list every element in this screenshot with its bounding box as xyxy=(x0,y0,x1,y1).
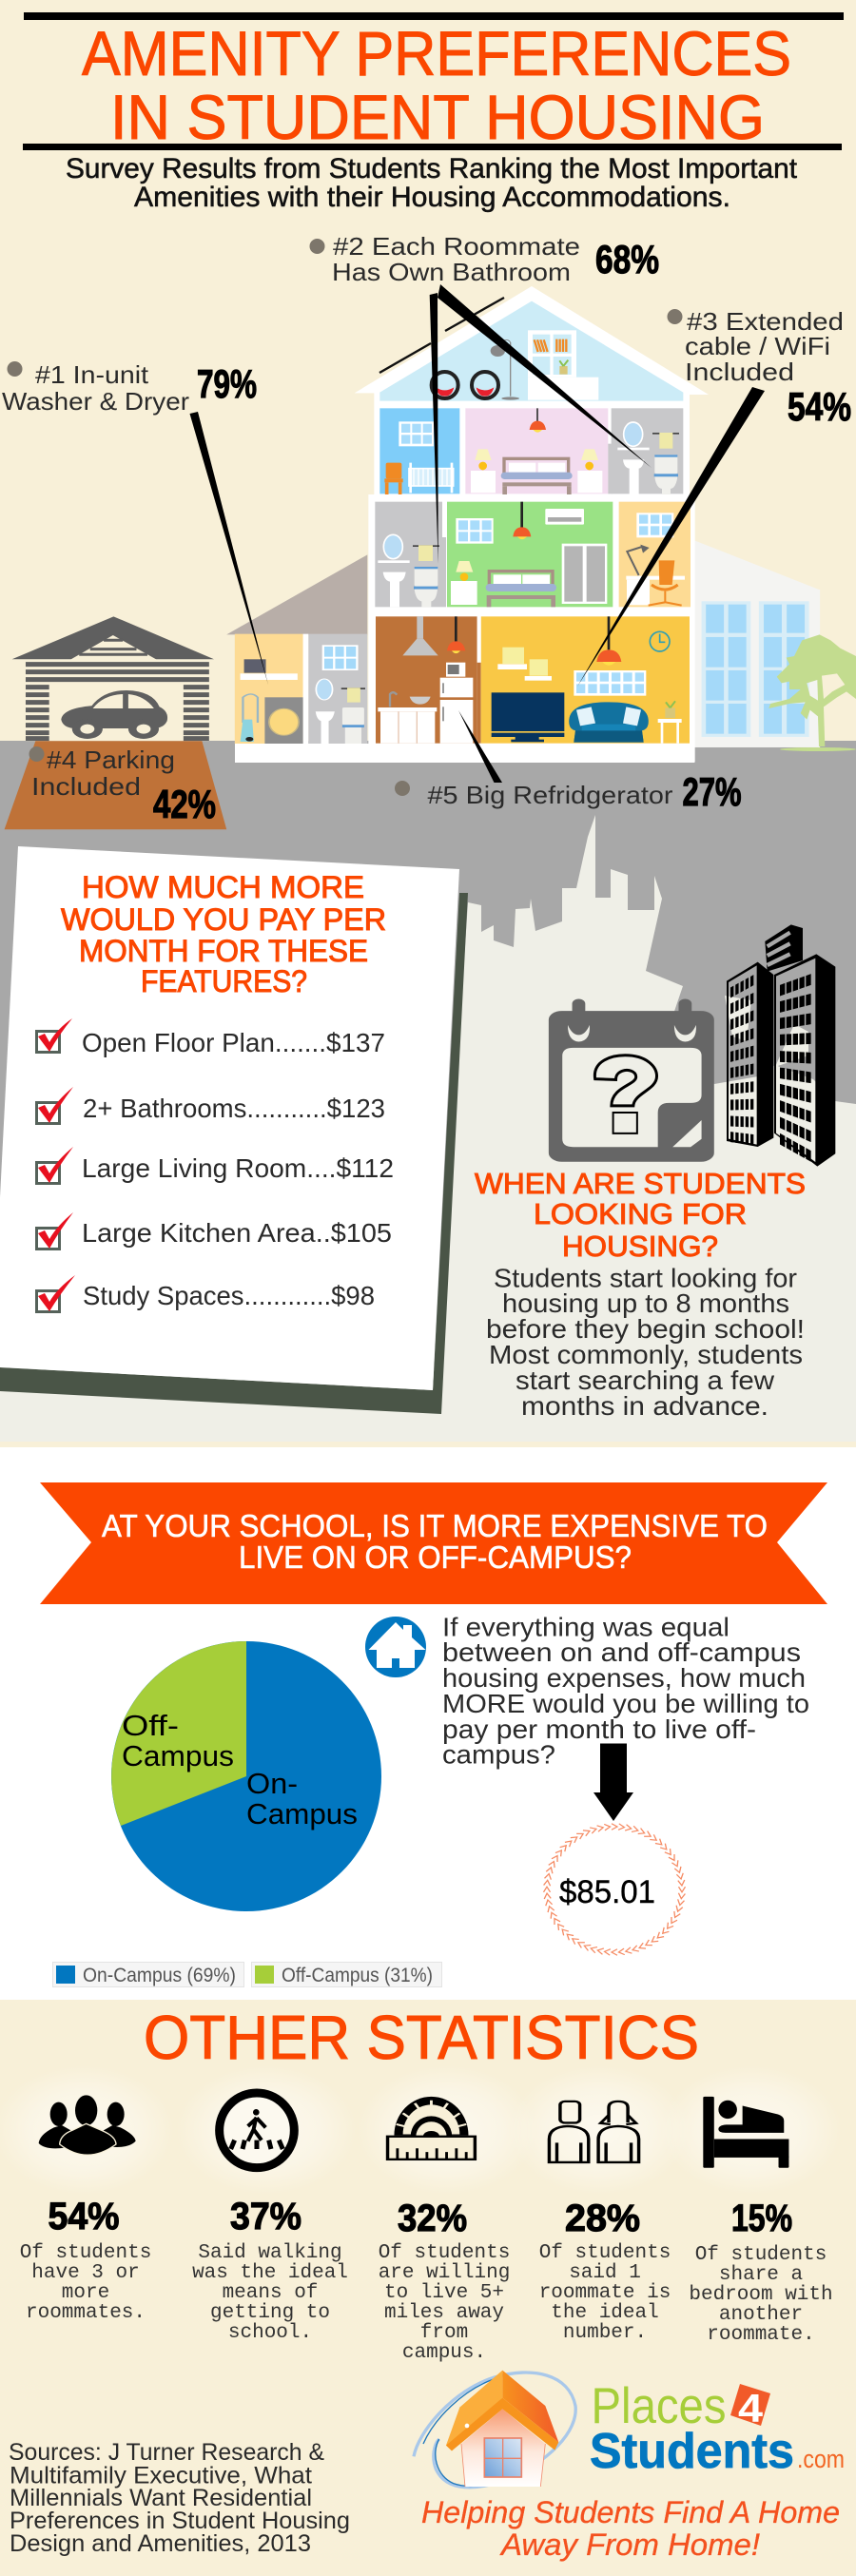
panel heading: FEATURES? xyxy=(141,964,307,998)
heading: when are students looking: HOUSING? xyxy=(562,1230,718,1263)
stat: 28 percent one roommate: 28% xyxy=(565,2198,640,2239)
text block: willingness to pay: between on and off-campus xyxy=(442,1637,801,1667)
callout: #3 cable and wifi xyxy=(577,307,851,687)
stat: 54 percent 3+ roommates: have 3 or xyxy=(31,2262,140,2284)
callout: #5 big refrigerator: 27% xyxy=(683,769,742,814)
logo: Places4Students xyxy=(414,2371,845,2562)
callout: #4 parking: Included xyxy=(31,772,141,801)
stat: 28 percent one roommate: Of students xyxy=(539,2242,671,2264)
callout: #4 parking: 42% xyxy=(153,782,216,826)
stat: 28 percent one roommate: roommate is xyxy=(539,2282,671,2304)
stat: 15 percent share bedroom: roommate. xyxy=(707,2324,815,2346)
stat: 32 percent live 5+ miles away: campus. xyxy=(402,2342,486,2364)
stat: 28 percent one roommate: number. xyxy=(563,2322,647,2344)
logo: Places4Students: Places xyxy=(592,2378,727,2434)
banner: on or off campus question: AT YOUR SCHOOL, IS IT MORE EXPENSIVE TO xyxy=(102,1508,768,1543)
heading: when are students looking: WHEN ARE STUDENTS xyxy=(475,1167,806,1200)
checklist item: kitchen: Large Kitchen Area..$105 xyxy=(82,1218,392,1248)
nursery xyxy=(384,421,454,494)
icon: apartment towers xyxy=(727,924,835,1167)
green bedroom xyxy=(451,502,607,607)
stat: 37 percent walking: school. xyxy=(228,2322,312,2344)
tagline xyxy=(421,2495,840,2562)
callout: #2 own bathroom xyxy=(310,232,659,564)
panel heading: HOW MUCH MORE xyxy=(82,870,364,904)
logo: Places4Students: Students xyxy=(590,2424,794,2479)
pie chart: Campus xyxy=(122,1739,234,1772)
subtitle: Amenities with their Housing Accommodations. xyxy=(134,182,730,213)
checklist item: study spaces xyxy=(36,1275,375,1312)
callout: #1 washer and dryer: 79% xyxy=(197,361,257,406)
stat: 32 percent live 5+ miles away: 32% xyxy=(398,2198,467,2239)
heading: other statistics: OTHER STATISTICS xyxy=(144,2003,699,2072)
stat: 28 percent one roommate: said 1 xyxy=(569,2262,641,2284)
main house cross-section xyxy=(355,286,709,763)
callout: #3 cable and wifi: cable / WiFi xyxy=(685,332,830,360)
callout: #2 own bathroom: #2 Each Roommate xyxy=(333,232,580,261)
panel heading: WOULD YOU PAY PER xyxy=(61,902,386,937)
stat: 32 percent live 5+ miles away: from xyxy=(420,2322,468,2344)
heading: when are students looking xyxy=(475,1167,806,1263)
text block: when students look: Students start looking for xyxy=(494,1263,797,1293)
checklist item: bathrooms: 2+ Bathrooms...........$123 xyxy=(83,1094,385,1123)
chart legend: Off-Campus (31%) xyxy=(282,1965,433,1986)
left annex house xyxy=(226,554,367,744)
middle bathroom xyxy=(378,534,439,607)
icon: logo house xyxy=(414,2371,575,2488)
pie chart: Campus xyxy=(246,1797,358,1830)
attic furniture xyxy=(432,330,598,400)
right annex house xyxy=(694,540,820,747)
pink bedroom xyxy=(471,408,602,494)
logo: Places4Students: .com xyxy=(797,2445,845,2473)
garage xyxy=(5,616,226,829)
checklist item: open floor plan: Open Floor Plan.......$137 xyxy=(82,1028,385,1057)
kitchen xyxy=(378,616,473,744)
panel heading: MONTH FOR THESE xyxy=(79,934,368,968)
text block: willingness to pay: pay per month to live off- xyxy=(442,1714,756,1744)
callout: #2 own bathroom: 68% xyxy=(595,237,659,281)
stat: 37 percent walking: Said walking xyxy=(198,2242,342,2264)
callout: $85.01 in chevron ring xyxy=(537,1818,691,1961)
text block: willingness to pay xyxy=(442,1613,809,1769)
text block: when students look xyxy=(486,1263,805,1421)
callout: #1 washer and dryer xyxy=(2,360,268,685)
panel heading xyxy=(61,870,386,998)
stat: 54 percent 3+ roommates xyxy=(0,2065,174,2324)
stat: 15 percent share bedroom: bedroom with xyxy=(689,2284,833,2306)
checklist item: living room: Large Living Room....$112 xyxy=(82,1153,394,1183)
text block: willingness to pay: If everything was equal xyxy=(442,1613,730,1642)
chart legend xyxy=(53,1963,441,1987)
stat: 54 percent 3+ roommates: 54% xyxy=(48,2196,120,2237)
upper bathroom xyxy=(617,422,679,494)
text block: sources: Preferences in Student Housing xyxy=(10,2508,350,2534)
icon: number 4 tile xyxy=(730,2384,770,2431)
icon: three people xyxy=(39,2095,136,2155)
icon: protractor and ruler xyxy=(388,2097,475,2160)
checklist item: study spaces: Study Spaces............$98 xyxy=(83,1281,375,1310)
header: title and subtitle xyxy=(23,12,844,213)
chart legend: On-Campus (69%) xyxy=(83,1965,236,1986)
heading: when are students looking: LOOKING FOR xyxy=(534,1197,747,1230)
icon: car xyxy=(61,690,167,739)
text block: when students look: before they begin school! xyxy=(486,1314,805,1344)
icon: house in blue circle xyxy=(365,1617,426,1677)
text block: when students look: housing up to 8 months xyxy=(502,1288,789,1318)
text block: when students look: Most commonly, students xyxy=(489,1340,803,1369)
pie chart: On- xyxy=(246,1767,298,1800)
stat: 28 percent one roommate xyxy=(509,2065,690,2344)
stat: 54 percent 3+ roommates: Of students xyxy=(20,2242,151,2264)
text block: willingness to pay: MORE would you be willing to xyxy=(442,1689,809,1718)
icon: person in bed xyxy=(703,2097,788,2168)
callout: #4 parking xyxy=(29,746,216,826)
text block: willingness to pay: housing expenses, how much xyxy=(442,1663,806,1693)
tree xyxy=(768,634,856,751)
callout: #3 cable and wifi: #3 Extended xyxy=(687,307,844,336)
text block: willingness to pay: campus? xyxy=(442,1740,555,1769)
checklist item: kitchen xyxy=(36,1212,392,1249)
callout: #1 washer and dryer: Washer & Dryer xyxy=(2,387,189,416)
stat: 28 percent one roommate: the ideal xyxy=(551,2302,659,2324)
callout: #5 big refrigerator: #5 Big Refridgerator xyxy=(428,781,673,809)
callout: #3 cable and wifi: Included xyxy=(685,358,794,386)
stat: 32 percent live 5+ miles away: are willing xyxy=(379,2262,510,2284)
callout: #1 washer and dryer: #1 In-unit xyxy=(35,360,149,389)
stat: 15 percent share bedroom: another xyxy=(719,2304,803,2326)
checklist item: open floor plan xyxy=(36,1018,385,1057)
stat: 37 percent walking: getting to xyxy=(210,2302,330,2324)
tagline: Helping Students Find A Home xyxy=(421,2495,840,2529)
checklist item: living room xyxy=(36,1147,394,1183)
stat: 15 percent share bedroom: share a xyxy=(719,2264,803,2286)
callout: #5 big refrigerator xyxy=(395,710,742,814)
subtitle: Survey Results from Students Ranking the Most Important xyxy=(66,153,798,184)
study xyxy=(626,513,685,606)
stat: 15 percent share bedroom: 15% xyxy=(731,2198,792,2239)
tagline: Away From Home! xyxy=(499,2528,760,2562)
stat: 54 percent 3+ roommates: roommates. xyxy=(26,2302,146,2324)
stat: 54 percent 3+ roommates: more xyxy=(62,2282,109,2304)
stat: 32 percent live 5+ miles away: Of students xyxy=(379,2242,510,2264)
text block: sources: Millennials Want Residential xyxy=(10,2485,312,2511)
subtitle xyxy=(66,153,798,213)
callout: #2 own bathroom: Has Own Bathroom xyxy=(332,258,571,286)
icon: pedestrian crossing sign xyxy=(220,2093,294,2168)
text block: when students look: start searching a few xyxy=(516,1365,775,1395)
title xyxy=(82,18,791,152)
arrow: down to amount xyxy=(593,1744,633,1821)
text block: when students look: months in advance. xyxy=(521,1391,768,1421)
text block: sources: Sources: J Turner Research & xyxy=(9,2439,324,2466)
stat: 32 percent live 5+ miles away: to live 5+ xyxy=(384,2282,504,2304)
text block: sources: Design and Amenities, 2013 xyxy=(10,2530,311,2557)
title: IN STUDENT HOUSING xyxy=(110,82,765,152)
stat: 32 percent live 5+ miles away xyxy=(357,2065,537,2364)
stat: 15 percent share bedroom xyxy=(661,2065,842,2346)
stat: 15 percent share bedroom: Of students xyxy=(695,2244,827,2266)
stat: 37 percent walking xyxy=(176,2065,357,2344)
icon: two roommates xyxy=(549,2101,639,2162)
pie chart: Off- xyxy=(122,1709,179,1742)
callout: #4 parking: #4 Parking xyxy=(47,746,175,774)
text block: sources: Multifamily Executive, What xyxy=(10,2463,312,2489)
icon: calendar with question mark xyxy=(549,998,714,1162)
stat: 37 percent walking: 37% xyxy=(230,2196,302,2237)
text block: sources xyxy=(9,2439,350,2557)
pie chart xyxy=(111,1641,381,1911)
left tower windows xyxy=(730,980,753,1140)
icon: number 4 tile: 4 xyxy=(738,2386,764,2431)
stat: 37 percent walking: means of xyxy=(223,2282,318,2304)
callout: $85.01 in chevron ring: $85.01 xyxy=(559,1874,655,1910)
right tower windows xyxy=(780,979,811,1156)
banner: on or off campus question xyxy=(40,1482,827,1604)
stat: 32 percent live 5+ miles away: miles away xyxy=(384,2302,504,2324)
banner: on or off campus question: LIVE ON OR OFF-CAMPUS? xyxy=(239,1540,632,1575)
living room xyxy=(492,616,682,744)
checklist item: bathrooms xyxy=(36,1087,385,1124)
stat: 37 percent walking: was the ideal xyxy=(192,2262,348,2284)
panel: how much more would you pay xyxy=(0,846,468,1414)
title: AMENITY PREFERENCES xyxy=(82,18,791,88)
